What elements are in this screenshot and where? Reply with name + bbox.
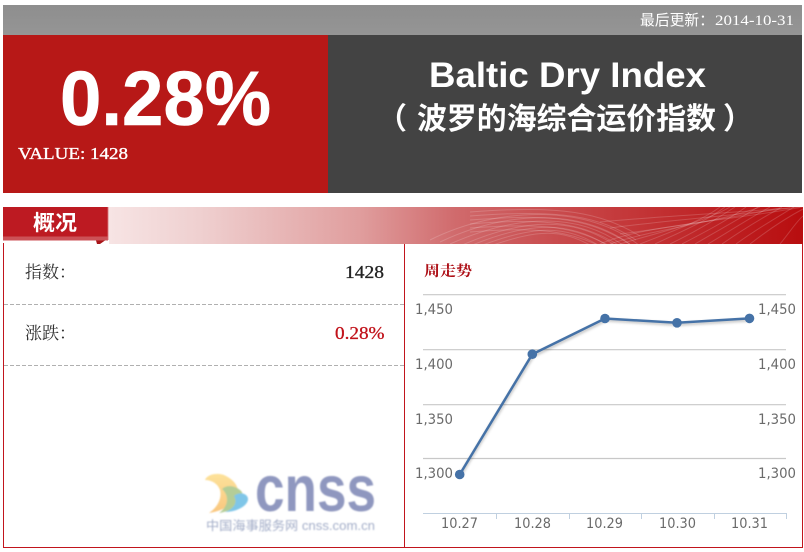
left y axis labels (415, 302, 453, 482)
left y axis labels: 1,400 (415, 357, 453, 373)
change row: 涨跌： (25, 319, 76, 344)
subtitle: 波罗的海综合运价指数 (417, 103, 716, 136)
line chart: weekly trend (415, 295, 796, 532)
right y axis labels: 1,450 (758, 302, 796, 318)
x axis labels: 10.30 (659, 516, 696, 532)
left y axis labels: 1,450 (415, 302, 453, 318)
section banner (109, 207, 803, 246)
last updated date: 2014-10-31 (715, 13, 794, 29)
percentage value: 0.28% (60, 56, 271, 142)
x axis (423, 514, 787, 519)
update bar (3, 5, 802, 35)
right y axis labels: 1,350 (758, 412, 796, 428)
left y axis labels: 1,350 (415, 412, 453, 428)
content panel frame (3, 243, 803, 548)
x axis labels: 10.27 (441, 516, 478, 532)
x axis labels: 10.31 (731, 516, 768, 532)
index row: 指数： (25, 258, 76, 283)
x axis labels: 10.29 (586, 516, 623, 532)
tab heading: 概况 (33, 212, 77, 235)
logo caption: 中国海事服务网 cnss.com.cn (206, 518, 375, 533)
x axis labels: 10.28 (514, 516, 551, 532)
panel: index summary (4, 258, 404, 366)
panel: dark title block (328, 35, 802, 193)
data series (455, 314, 754, 479)
change row: 0.28% (335, 323, 384, 343)
subtitle: （ (377, 103, 407, 136)
last updated label: 最后更新： (640, 12, 714, 29)
title: Baltic Dry Index (429, 56, 707, 95)
subtitle: ） (723, 103, 753, 136)
index value: VALUE: 1428 (18, 144, 128, 163)
logo: cnss (205, 452, 376, 533)
panel: red value block (3, 35, 328, 193)
section tab: overview (3, 207, 108, 244)
change row (25, 319, 384, 344)
x axis labels (441, 516, 768, 532)
icon: logo swoosh (205, 474, 248, 513)
right y axis labels: 1,300 (758, 466, 796, 482)
right y axis labels (758, 302, 796, 482)
chart heading: 周走势 (424, 262, 473, 280)
right y axis labels: 1,400 (758, 357, 796, 373)
logo wordmark: cnss (255, 452, 376, 525)
left y axis labels: 1,300 (415, 466, 453, 482)
index row (25, 258, 384, 283)
index row: 1428 (345, 262, 384, 282)
